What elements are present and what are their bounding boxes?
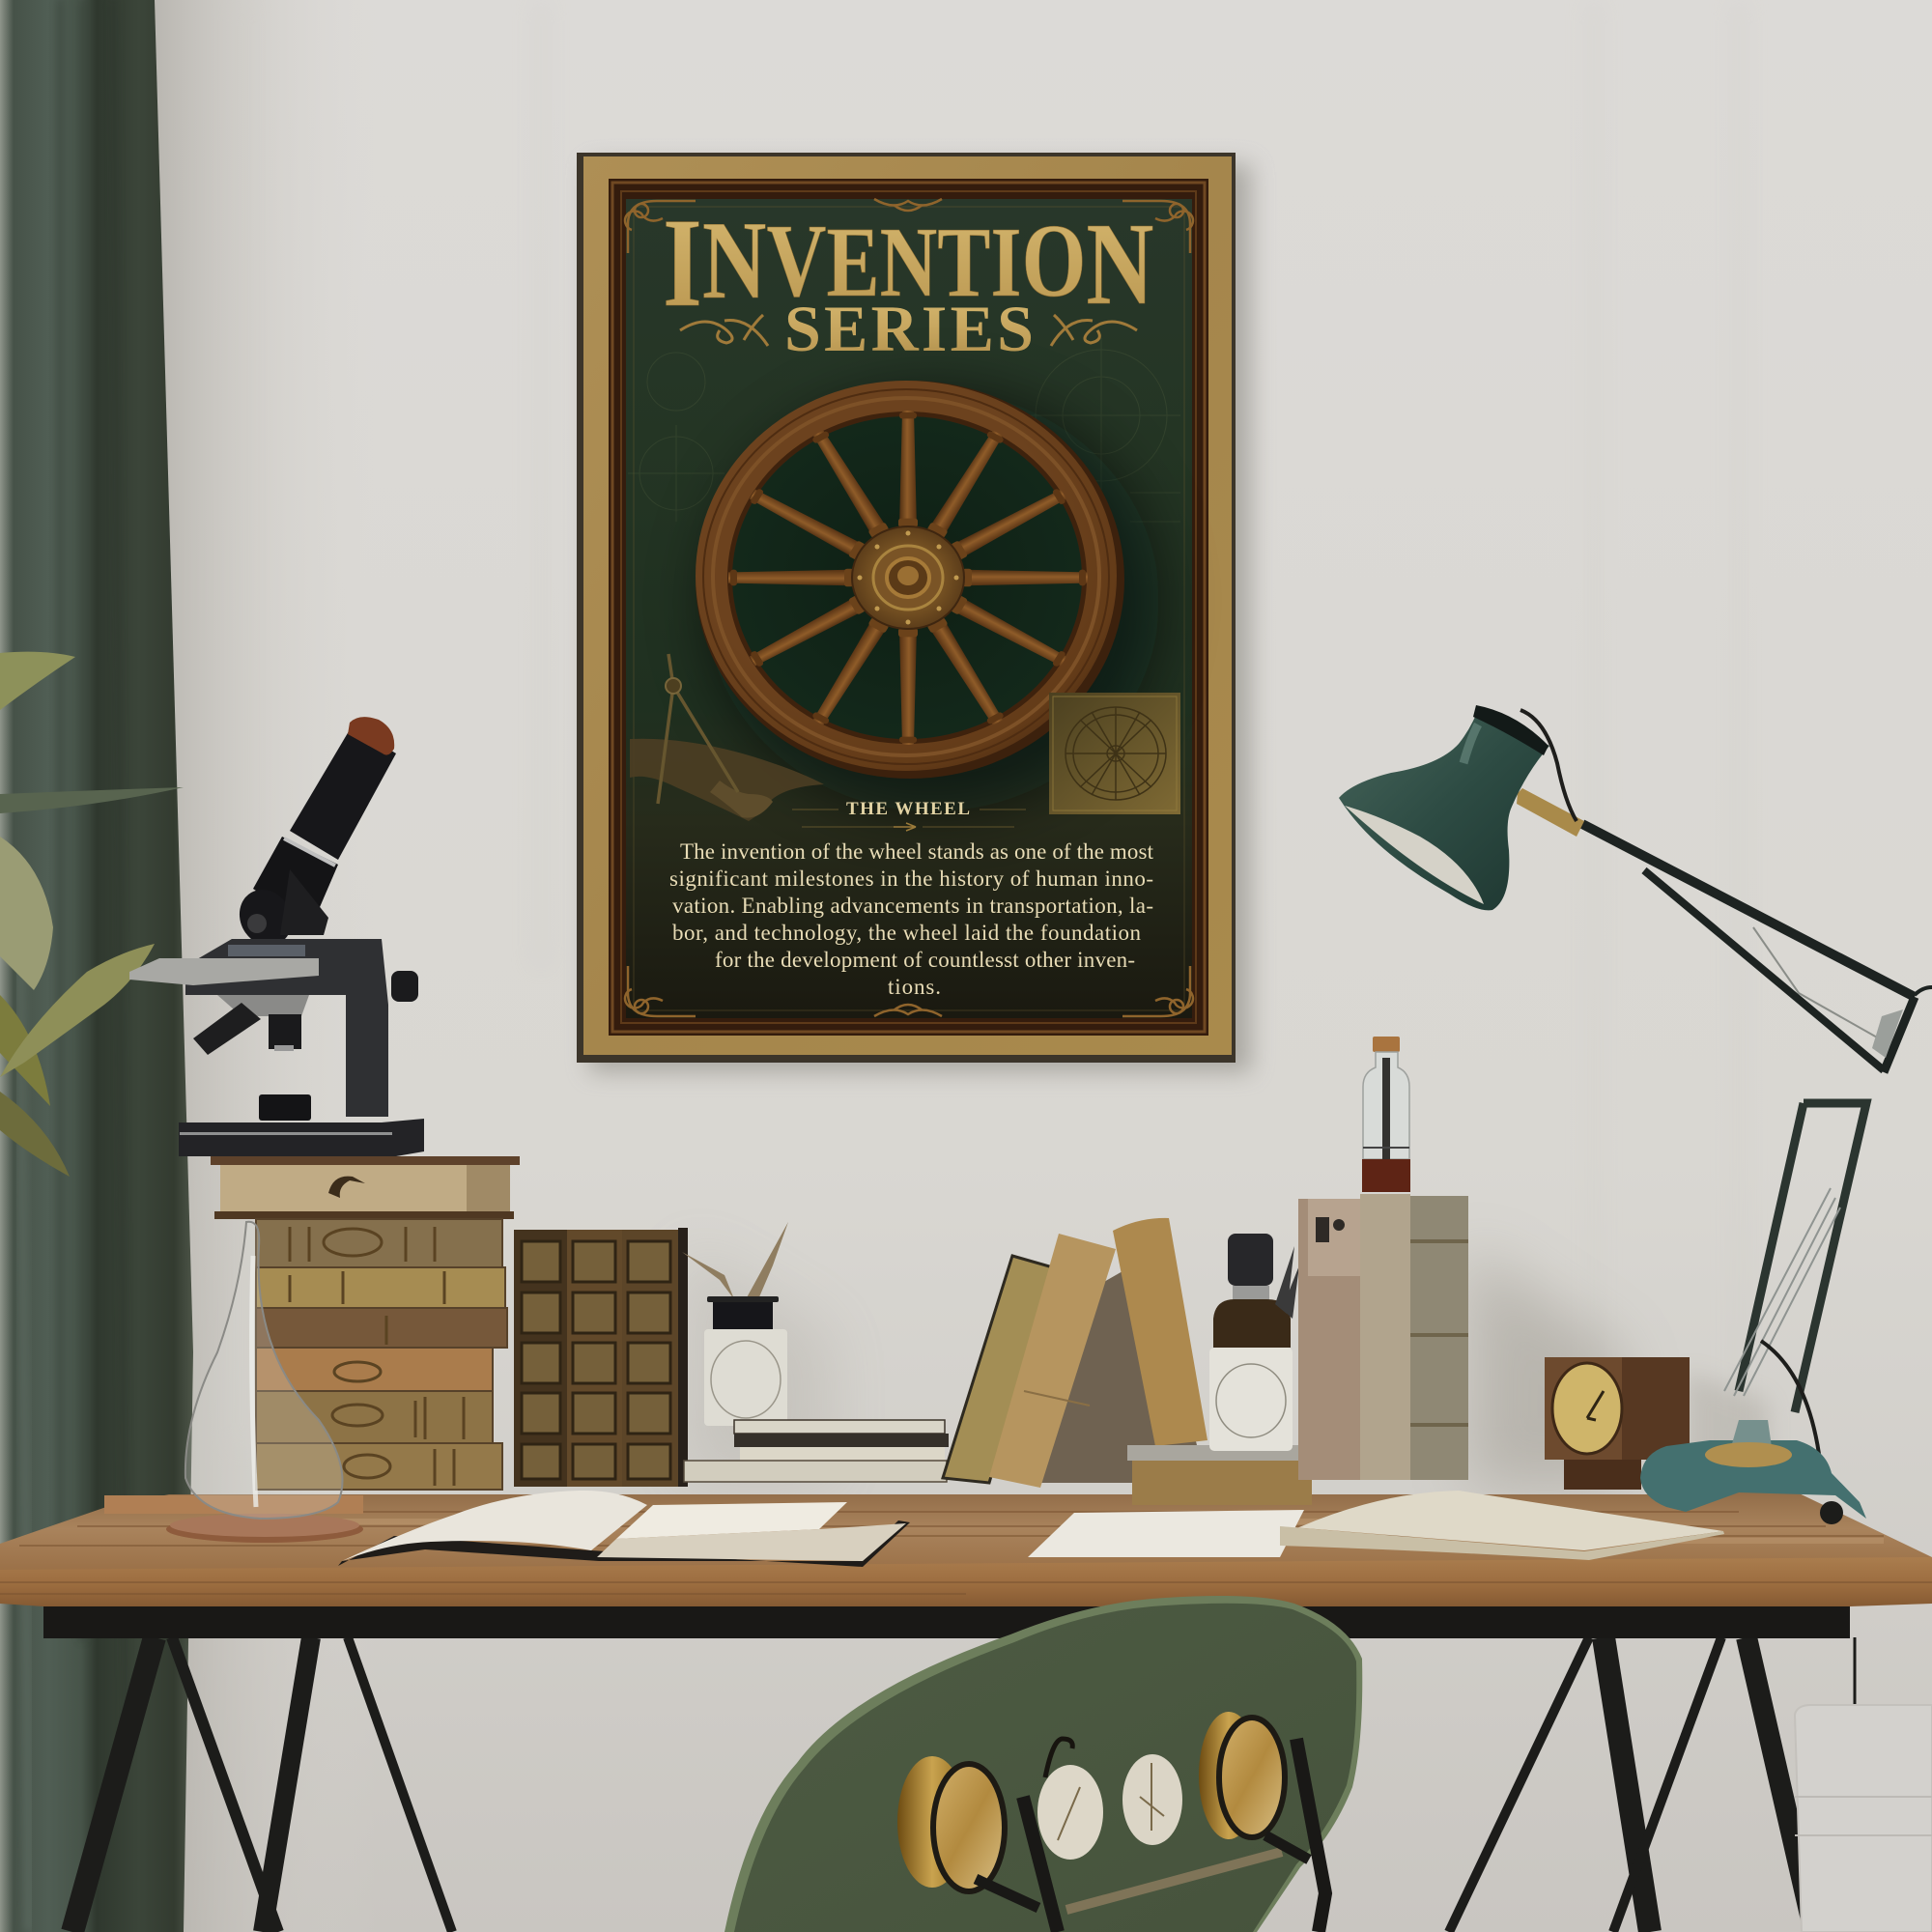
ink bottle xyxy=(1209,1234,1299,1451)
blueprint sketches xyxy=(628,338,1180,522)
lamp truss detail xyxy=(1872,1009,1903,1058)
open book right xyxy=(1028,1491,1724,1560)
left brass dial xyxy=(897,1756,1005,1891)
desk lamp xyxy=(1339,705,1932,1524)
upright ornate books xyxy=(514,1228,688,1487)
desk legs xyxy=(72,1637,1879,1932)
poster inner border xyxy=(609,179,1208,1036)
wheel rim xyxy=(696,381,1124,779)
top book xyxy=(211,1156,520,1219)
microscope cap xyxy=(348,717,394,755)
radiator xyxy=(1795,1705,1932,1932)
body text: The invention of the wheel stands as one of the most xyxy=(680,839,1154,864)
wheel shadow xyxy=(705,390,1159,811)
chair frame xyxy=(976,1739,1325,1932)
hook xyxy=(1045,1739,1072,1777)
microscope base xyxy=(179,1119,424,1156)
microscope stage xyxy=(129,958,319,985)
microscope objectives xyxy=(193,995,309,1055)
body text: tions. xyxy=(888,975,941,999)
lamp cable xyxy=(1520,710,1577,821)
poster xyxy=(577,153,1251,1072)
notebook cover edge xyxy=(338,1520,910,1567)
notebook left page xyxy=(342,1491,647,1561)
curtain xyxy=(0,0,193,1932)
leaning books xyxy=(943,1218,1208,1488)
body text: vation. Enabling advancements in transportation, la- xyxy=(672,894,1153,918)
stack of old books xyxy=(211,1156,520,1490)
lamp cord xyxy=(1761,1341,1819,1454)
pencil jar xyxy=(682,1222,788,1426)
lamp stand frame xyxy=(1739,1103,1866,1412)
title flourishes xyxy=(680,315,1137,346)
spine emblems xyxy=(290,1227,464,1486)
title: invention: N xyxy=(702,198,766,322)
book panels xyxy=(522,1241,670,1479)
leaning book three xyxy=(1113,1218,1208,1446)
title: invention xyxy=(663,192,1153,333)
body text: for the development of countlesst other inven- xyxy=(715,948,1135,972)
lamp connector xyxy=(1517,788,1584,837)
leaning book two xyxy=(989,1234,1116,1488)
microscope arm xyxy=(185,939,388,1117)
title: invention: V xyxy=(766,204,826,319)
lamp base xyxy=(1640,1420,1866,1524)
microscope tube xyxy=(290,726,396,860)
glass body xyxy=(185,1222,342,1519)
blueprint wheel diagram xyxy=(1049,693,1180,814)
microscope knob xyxy=(391,971,418,1002)
glass vase xyxy=(104,1222,363,1543)
small book under bottle xyxy=(1127,1445,1312,1505)
small flat books xyxy=(684,1420,949,1482)
right brass dial xyxy=(1199,1712,1285,1839)
microscope xyxy=(129,717,424,1156)
title: invention: I xyxy=(663,192,702,333)
heading: the wheel: THE WHEEL xyxy=(846,799,972,819)
poster shadow xyxy=(589,164,1251,1072)
wheel xyxy=(696,381,1159,811)
title: series: SERIES xyxy=(784,292,1034,365)
title: invention: ENTIO xyxy=(826,204,1086,319)
poster frame xyxy=(577,153,1236,1063)
coaster xyxy=(166,1516,363,1543)
wheel hub xyxy=(852,526,964,629)
body text: significant milestones in the history of human inno- xyxy=(669,867,1153,891)
body text: bor, and technology, the wheel laid the foundation xyxy=(672,921,1142,945)
gilded spines xyxy=(256,1219,507,1490)
scroll and compass xyxy=(630,654,824,821)
lamp arm xyxy=(1582,824,1932,1072)
poster green panel xyxy=(626,199,1192,1018)
chair xyxy=(724,1596,1362,1932)
title: invention: N xyxy=(1086,199,1153,329)
corner ornaments xyxy=(625,199,1193,1016)
lamp shade xyxy=(1339,705,1549,910)
desk clock xyxy=(1545,1357,1690,1490)
desk xyxy=(0,1488,1932,1638)
chair back xyxy=(724,1596,1362,1932)
small corked bottle xyxy=(1362,1037,1410,1192)
plant leaves xyxy=(0,652,184,1177)
body text xyxy=(669,839,1154,999)
chair crossbar xyxy=(1066,1852,1282,1910)
wall shadow between books xyxy=(1034,1256,1198,1483)
microscope head xyxy=(229,880,302,955)
notebook right page xyxy=(616,1502,847,1539)
wheel spokes xyxy=(728,411,1088,745)
tray xyxy=(104,1495,363,1514)
notebook page block xyxy=(597,1523,906,1561)
wall shadows behind desk items xyxy=(686,1246,1768,1488)
leaning book one xyxy=(943,1256,1053,1483)
white medallions xyxy=(1037,1754,1182,1860)
open notebook left xyxy=(338,1491,910,1567)
upright plain books xyxy=(1298,1194,1468,1480)
